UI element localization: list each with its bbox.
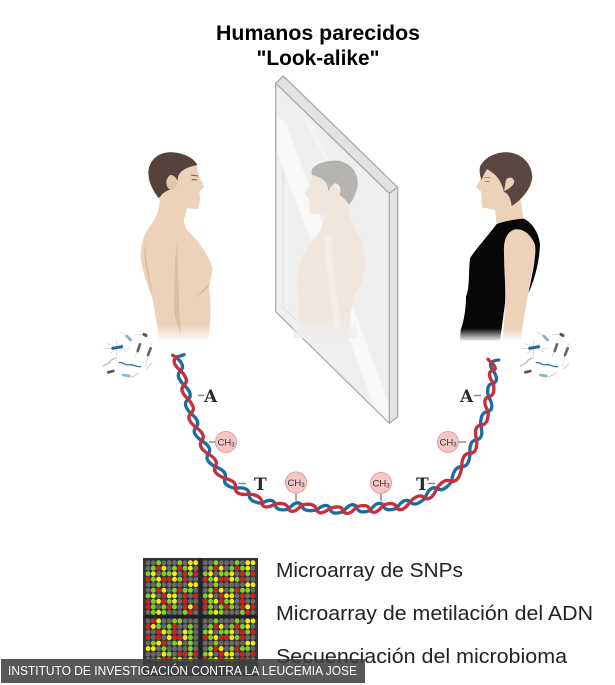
legend labels: Microarray de metilación del ADN [276,603,593,625]
microarray spots: top right [205,563,254,612]
DNA helix [173,355,499,513]
title: "Look-alike" [256,47,380,70]
base labels: A [203,387,218,407]
microarray spots: bottom left [148,621,196,671]
CH3 lower left: CH [287,478,301,489]
CH3 lower left: 3 [301,483,305,489]
right man [457,152,540,342]
CH3 upper left: CH [217,438,231,448]
title: Humanos parecidos [216,22,420,45]
mirror reflection [293,161,365,338]
CH3 lower right [370,472,392,494]
microarray spots: top left [148,563,196,612]
icon: left microbiome [103,332,152,377]
base labels: T [416,475,429,495]
legend labels: Secuenciación del microbioma [276,646,568,668]
CH3 upper right: 3 [453,442,457,448]
microarray spots: bottom right [205,621,254,671]
caption bar: INSTITUTO DE INVESTIGACIÓN CONTRA LA LEUCEMIA JOSE [8,663,357,678]
base labels: A [459,387,474,407]
CH3 upper right [438,432,458,452]
methyl groups [209,432,466,501]
CH3 lower left [286,472,306,493]
CH3 lower right: CH [372,478,386,490]
CH3 upper left: 3 [231,442,235,448]
CH3 lower right: 3 [386,484,390,490]
left man [137,152,220,342]
title [216,22,420,70]
CH3 upper left [216,432,236,452]
legend labels: Microarray de SNPs [276,560,463,582]
icon: right microbiome [520,332,569,377]
base labels: T [254,475,267,495]
CH3 upper right: CH [439,438,453,448]
base labels [198,387,481,495]
legend labels [276,560,593,668]
caption bar [1,659,365,683]
mirror [276,76,398,423]
microarray [143,558,258,676]
